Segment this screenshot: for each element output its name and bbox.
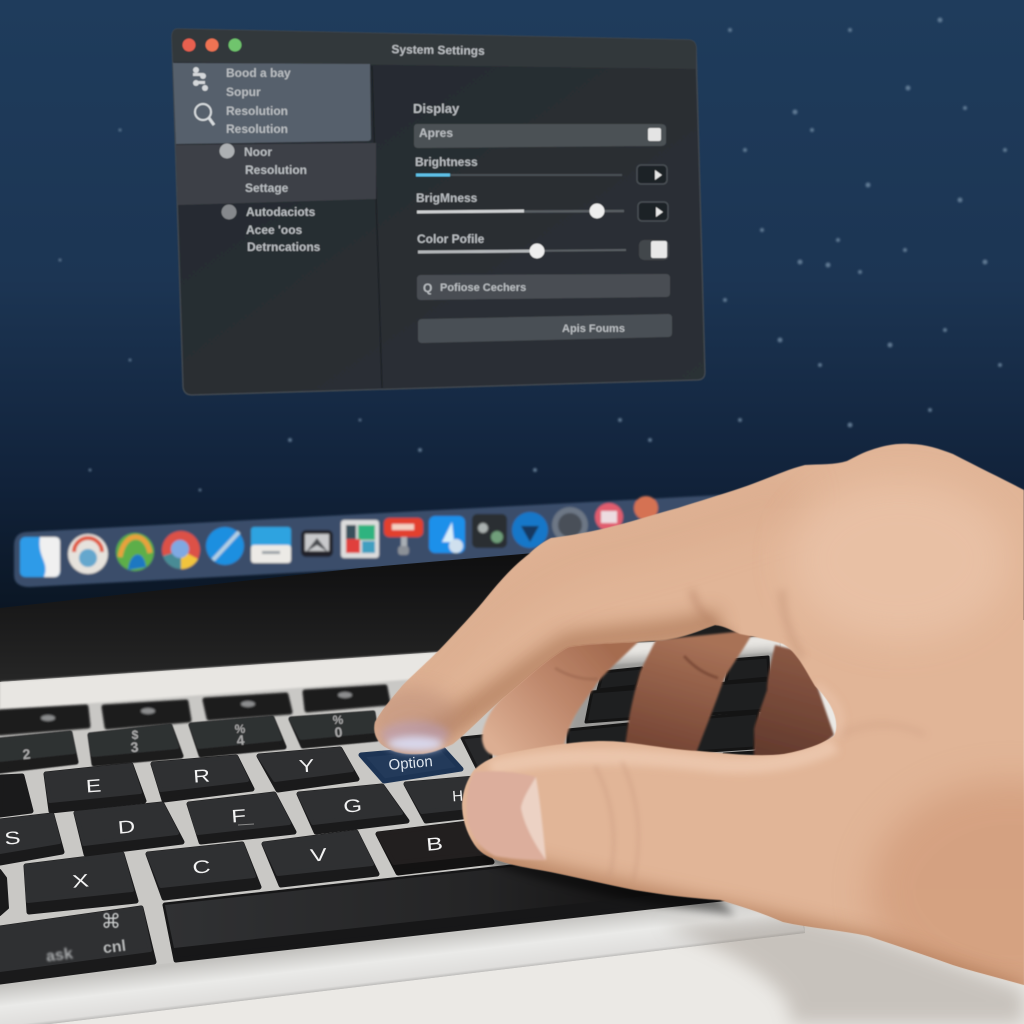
button: Apis Foums bbox=[562, 323, 625, 335]
icon: people bbox=[193, 67, 208, 91]
highlighted key: Option: Option bbox=[388, 753, 433, 774]
panel: System Settings window bbox=[172, 29, 705, 395]
key: spacebar bbox=[165, 866, 730, 960]
row: numbers: 0 bbox=[334, 724, 343, 740]
hand shading bbox=[366, 480, 1024, 1000]
hand with index finger and thumb bbox=[374, 444, 1024, 985]
row: function keys bbox=[0, 687, 388, 733]
sidebar divider bbox=[372, 66, 382, 388]
icon: blue disc bbox=[512, 512, 548, 548]
shade between fingers bbox=[560, 648, 775, 765]
shadow under thumb bbox=[480, 850, 735, 915]
sidebar text: Resolution bbox=[226, 104, 288, 118]
icon: card bbox=[251, 527, 291, 563]
icon: dark tile bbox=[301, 530, 333, 557]
pinky finger bbox=[754, 645, 834, 760]
sidebar: third group bbox=[222, 204, 321, 254]
heading: Display: Display bbox=[413, 101, 460, 116]
row: S D F G H: D bbox=[117, 817, 136, 838]
window title: System Settings bbox=[391, 42, 485, 58]
icon: compass bbox=[206, 527, 244, 565]
key: ctrl: ask bbox=[45, 945, 74, 966]
panel: app dock bbox=[14, 495, 720, 587]
sidebar text: Sopur bbox=[226, 85, 261, 99]
middle finger bbox=[482, 640, 640, 757]
stars bbox=[58, 18, 1007, 492]
dropdown: Display bbox=[414, 124, 666, 148]
icon: finder bbox=[20, 537, 60, 577]
thumb highlight bbox=[490, 745, 835, 768]
sidebar: second group: Resolution bbox=[245, 163, 307, 177]
row: numbers: 3 bbox=[130, 739, 139, 755]
sidebar: second group bbox=[176, 143, 376, 205]
key: ctrl: ⌘ bbox=[101, 911, 121, 933]
dropdown: Display: Apres bbox=[419, 126, 453, 140]
key: ctrl bbox=[0, 908, 154, 982]
window controls bbox=[182, 38, 242, 52]
row: numbers: $ bbox=[132, 728, 139, 742]
row: S D F G H: G bbox=[343, 796, 363, 817]
bullet bbox=[220, 144, 234, 158]
search field: Q bbox=[423, 281, 432, 295]
index underside shadow bbox=[385, 620, 720, 752]
sidebar: selected group bbox=[173, 63, 371, 144]
slider: Brightness 2 bbox=[416, 191, 668, 221]
slider: Brightness: Brightness bbox=[415, 155, 478, 169]
slider: Color Profile bbox=[417, 232, 669, 260]
row: numbers bbox=[0, 713, 377, 771]
row: X C V B: X bbox=[71, 870, 90, 892]
lower palm tone bbox=[870, 780, 1024, 1000]
slider: Brightness 2: BrigMness bbox=[416, 191, 478, 205]
icon: hand pressing the Option key bbox=[366, 444, 1024, 1000]
hand shadow on lip and desk bbox=[660, 915, 1024, 1024]
row: E R Y Option: Y bbox=[298, 756, 315, 777]
title bar bbox=[172, 29, 696, 69]
palm fold bbox=[782, 590, 802, 658]
search field: Pofiose Cechers bbox=[440, 282, 526, 294]
ring finger bbox=[625, 630, 754, 756]
desktop wallpaper bbox=[0, 0, 1024, 620]
sidebar: third group: Acee 'oos bbox=[246, 223, 303, 237]
row: numbers: % bbox=[333, 713, 344, 727]
sidebar: second group: Settage bbox=[245, 181, 289, 195]
row: S D F G H bbox=[0, 778, 480, 863]
icon: pink tile bbox=[595, 503, 623, 531]
row: E R Y Option bbox=[0, 748, 461, 815]
sidebar text: Bood a bay bbox=[226, 66, 291, 80]
row: E R Y Option: R bbox=[193, 766, 211, 787]
icon: blue tile bbox=[429, 516, 465, 553]
icon: grey disc bbox=[552, 507, 588, 543]
front lip bbox=[0, 904, 805, 1024]
row: numbers: 4 bbox=[236, 732, 245, 748]
slider: Brightness bbox=[415, 155, 667, 184]
fingertip glow bbox=[381, 721, 449, 752]
sidebar text: Resolution bbox=[226, 122, 288, 136]
row: S D F G H: H bbox=[452, 788, 464, 805]
thumbnail bbox=[466, 771, 546, 860]
button bbox=[418, 314, 672, 343]
row: X C V B: C bbox=[192, 856, 211, 878]
sidebar: third group: Autodaciots bbox=[246, 205, 316, 219]
row: S D F G H: F bbox=[231, 806, 247, 827]
key: ctrl: cnl bbox=[102, 938, 127, 957]
search field bbox=[417, 274, 670, 300]
knuckle fold bbox=[692, 590, 735, 634]
row: numbers: % bbox=[235, 722, 246, 736]
row: X C V B bbox=[0, 823, 492, 915]
sidebar text bbox=[226, 66, 291, 136]
keys behind fingers bbox=[462, 648, 775, 770]
thumb bottom shadow bbox=[474, 856, 1024, 998]
sidebar: third group: Detrncations bbox=[247, 240, 321, 254]
icon: chrome bbox=[162, 531, 200, 569]
icon: colored grid bbox=[341, 520, 379, 558]
slider: Color Profile: Color Pofile bbox=[417, 232, 485, 246]
web fold bbox=[815, 686, 839, 738]
thumb joint wrinkles bbox=[595, 762, 638, 880]
index top tone bbox=[400, 490, 800, 700]
laptop bezel bbox=[0, 530, 800, 682]
row: X C V B: V bbox=[309, 844, 328, 866]
icon: red sign bbox=[384, 518, 423, 555]
highlighted key: Option bbox=[361, 748, 461, 781]
sidebar: second group: Noor bbox=[244, 145, 272, 159]
icon: browser round bbox=[68, 534, 108, 574]
row: S D F G H: S bbox=[4, 828, 21, 849]
row: numbers: 2 bbox=[22, 746, 31, 762]
icon: magnifier bbox=[195, 104, 214, 125]
top band bbox=[0, 636, 780, 710]
icon: dark app bbox=[472, 514, 507, 548]
back of hand highlight bbox=[790, 480, 1010, 640]
keyboard deck bbox=[0, 636, 805, 1024]
icon: green swirl bbox=[116, 533, 154, 571]
row: X C V B: B bbox=[425, 833, 444, 855]
fingertip tone bbox=[374, 686, 450, 739]
keyboard keys bbox=[0, 648, 775, 982]
row: E R Y Option: E bbox=[85, 776, 102, 797]
icon: orange tile bbox=[634, 496, 658, 520]
